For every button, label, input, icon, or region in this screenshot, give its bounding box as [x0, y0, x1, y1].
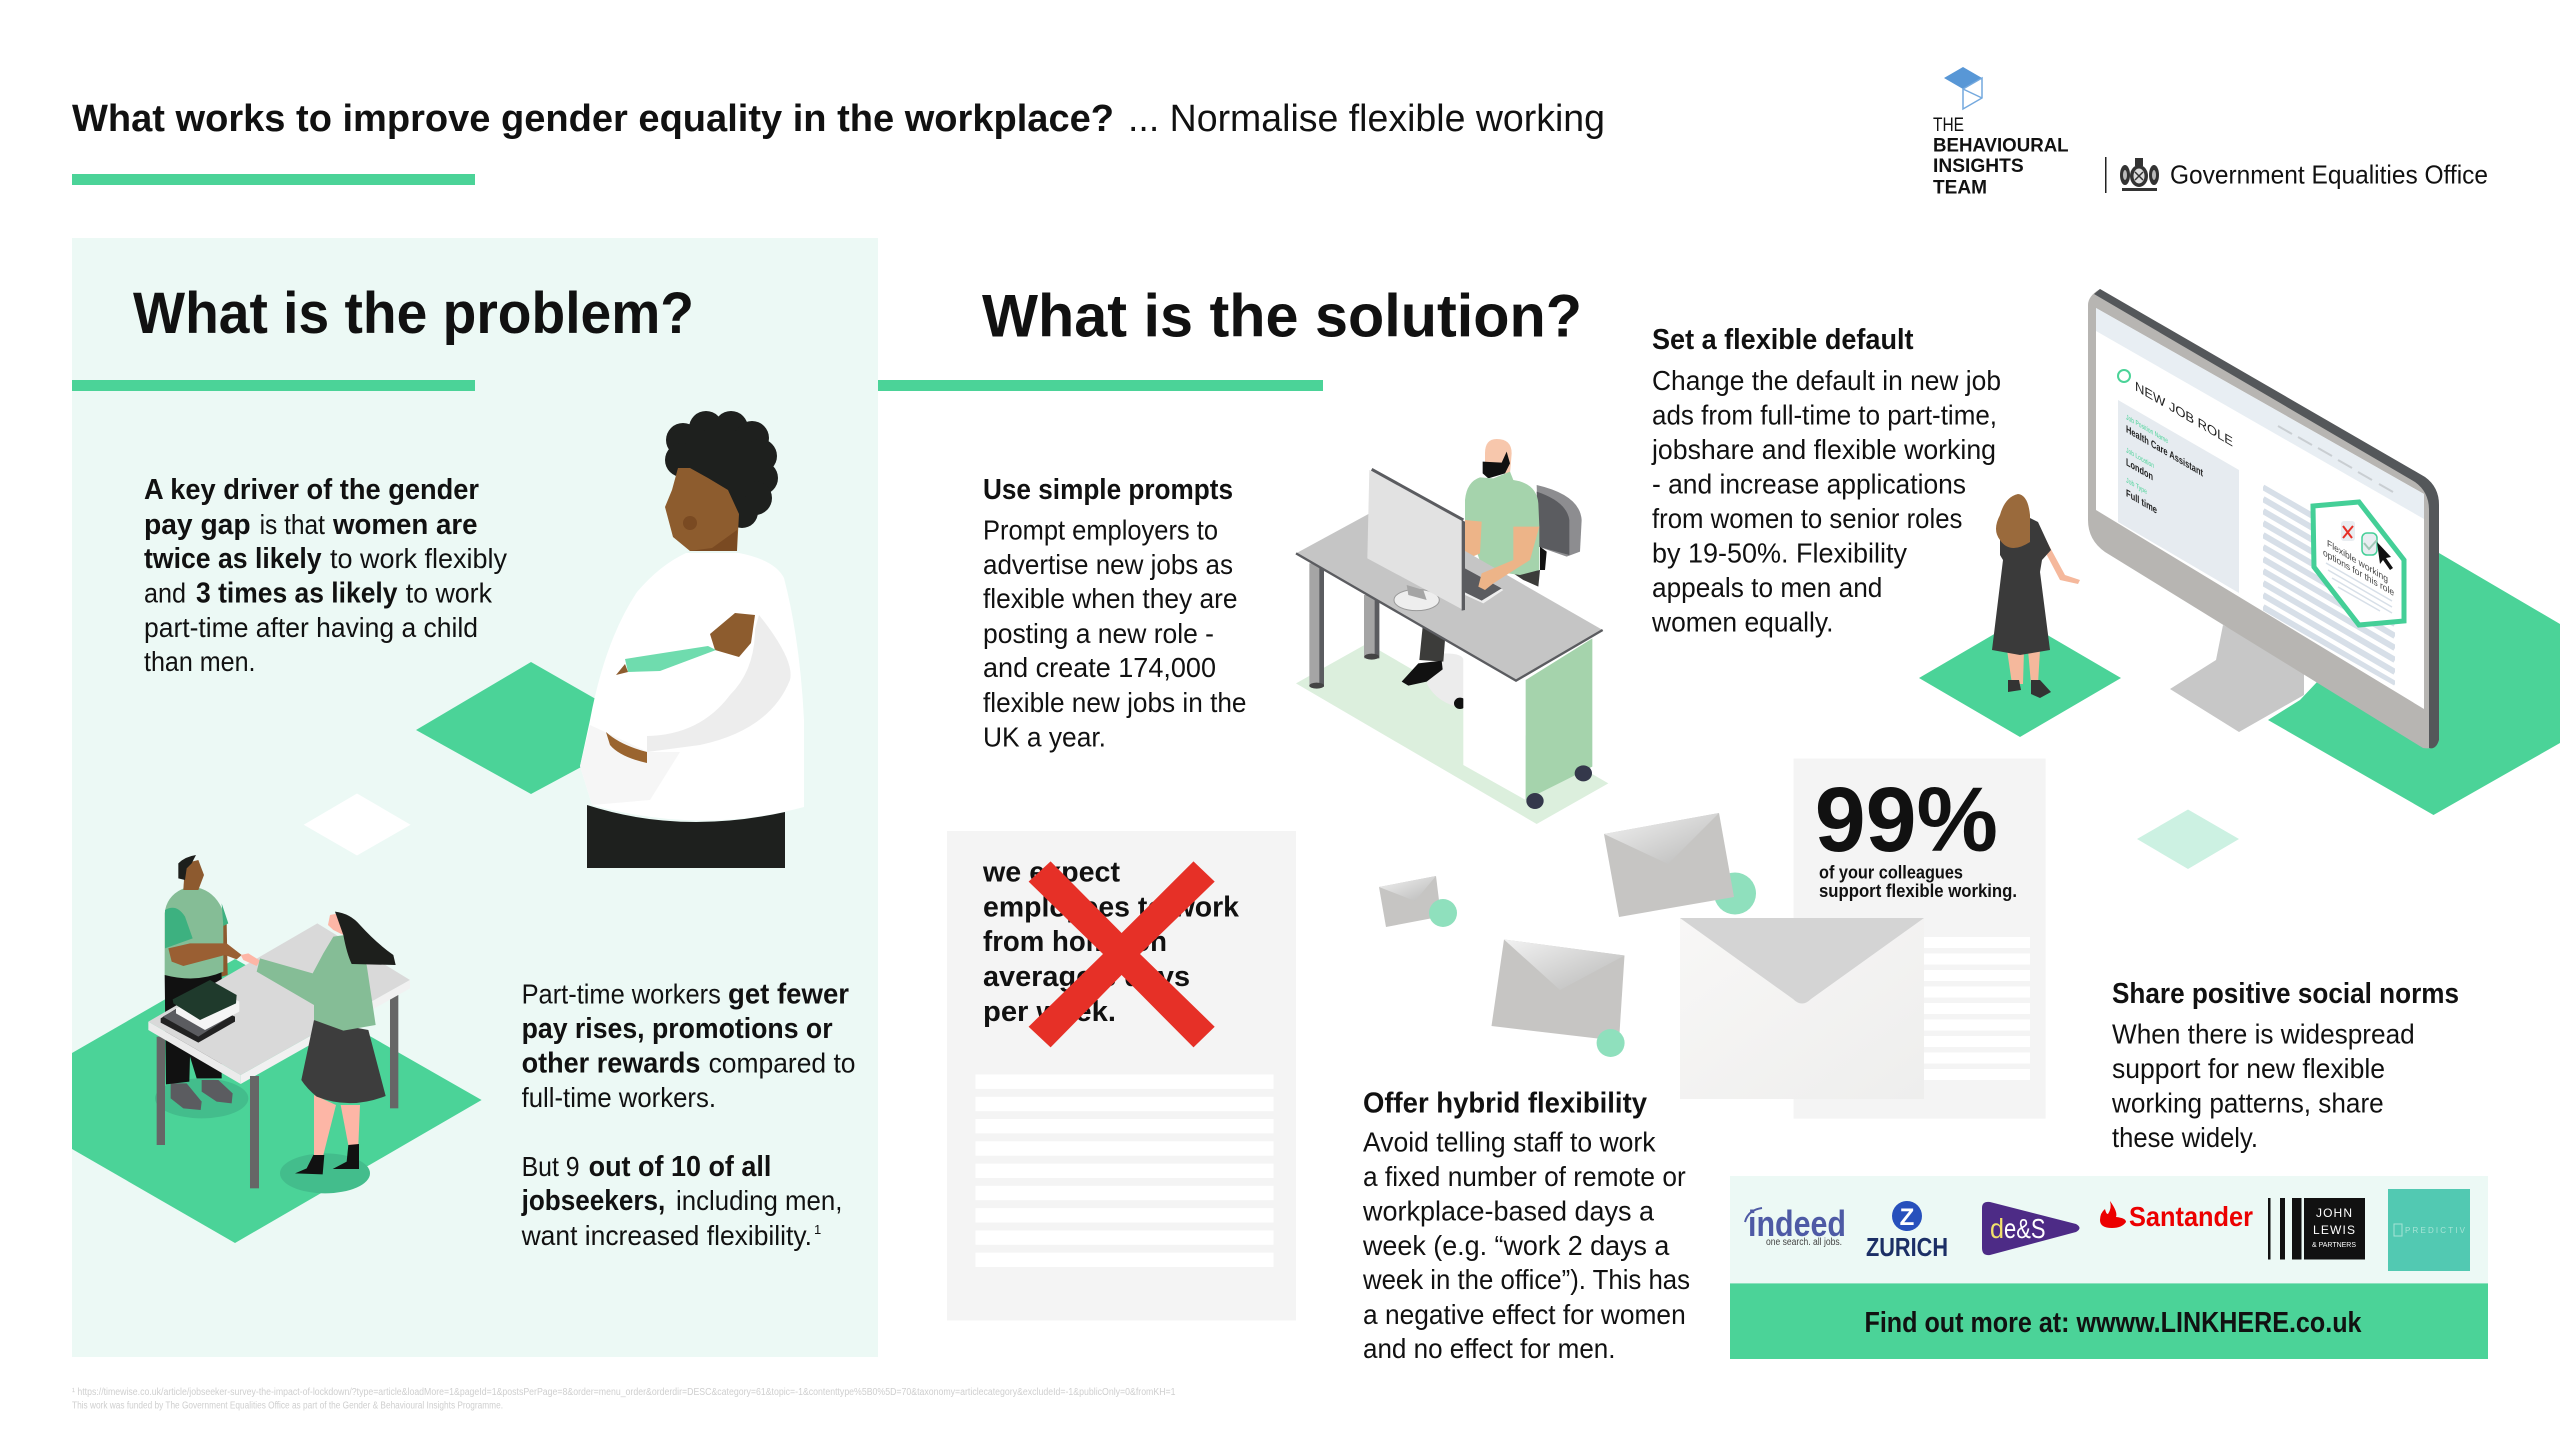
- call to action banner: [1730, 1283, 2488, 1359]
- white diamond: [304, 794, 411, 856]
- logo: Zurich: ZURICH: [1866, 1232, 1948, 1262]
- text block: offer hybrid flexibility: a fixed number of remote or: [1363, 1161, 1686, 1192]
- logo: Zurich: [1866, 1201, 1948, 1262]
- screen form: London: [2126, 457, 2153, 483]
- monitor body: [2088, 289, 2439, 748]
- text block: key driver of pay gap: [144, 474, 507, 677]
- logo: de&amp;s: [1982, 1202, 2080, 1255]
- statistic caption: support flexible working.: [1819, 881, 2017, 901]
- logo: de&amp;s: e&S: [2004, 1213, 2046, 1244]
- struck-out text: average 3 days: [983, 961, 1190, 993]
- text block: 9 out of 10 jobseekers: 1: [814, 1222, 821, 1237]
- logo: John Lewis & Partners: [2268, 1198, 2365, 1260]
- text block: 9 out of 10 jobseekers: [521, 1151, 842, 1251]
- text block: key driver of pay gap: and: [144, 577, 186, 608]
- red cross: [1029, 861, 1215, 1047]
- text block: key driver of pay gap: A key driver of the gender: [144, 474, 479, 506]
- panel: struck-out job ad: [947, 831, 1296, 1320]
- logo: The Behavioural Insights Team: INSIGHTS: [1933, 156, 2024, 177]
- text block: 9 out of 10 jobseekers: jobseekers,: [521, 1185, 665, 1217]
- statistic caption: of your colleagues: [1819, 862, 1963, 882]
- text block: key driver of pay gap: to work flexibly: [330, 543, 507, 574]
- struck-out text: per week.: [983, 996, 1116, 1028]
- diamond under standing woman: [1919, 619, 2121, 737]
- logo: John Lewis & Partners: JOHN: [2316, 1206, 2352, 1220]
- text block: set a flexible default: from women to senior roles: [1652, 503, 1962, 534]
- screen form: [2118, 400, 2239, 593]
- text block: 9 out of 10 jobseekers: including men,: [676, 1185, 842, 1216]
- text block: offer hybrid flexibility: week (e.g. “work 2 days a: [1362, 1230, 1670, 1261]
- text block: key driver of pay gap: is that: [260, 509, 325, 540]
- page title: What works to improve gender equality in the workplace?: [72, 98, 1114, 140]
- text block: key driver of pay gap: than men.: [144, 646, 256, 677]
- illustration: standing woman: [1992, 494, 2080, 698]
- text block: use simple prompts: posting a new role -: [983, 618, 1214, 649]
- text block: set a flexible default: appeals to men and: [1652, 572, 1882, 603]
- icon: medium envelope bottom: [1492, 940, 1625, 1057]
- hexagon callout: flexible working options: options for this role: [2323, 548, 2394, 599]
- text block: use simple prompts: Prompt employers to: [983, 514, 1218, 546]
- footnotes: [72, 1387, 1176, 1412]
- text block: use simple prompts: and create 174,000: [983, 652, 1216, 683]
- text block: key driver of pay gap: part-time after having a child: [144, 612, 478, 643]
- text block: offer hybrid flexibility: and no effect for men.: [1363, 1333, 1616, 1364]
- text block: offer hybrid flexibility: workplace-based days a: [1362, 1196, 1654, 1226]
- hexagon callout: flexible working options: Flexible working: [2327, 539, 2388, 585]
- text block: share positive social norms: working patterns, share: [2111, 1088, 2384, 1119]
- text block: key driver of pay gap: 3 times as likely: [196, 577, 398, 609]
- call to action banner: Find out more at: wwww.LINKHERE.co.uk: [1864, 1307, 2362, 1339]
- text block: use simple prompts: flexible when they are: [983, 583, 1238, 614]
- heading underline: problem: [72, 380, 475, 391]
- text block: set a flexible default: [1651, 324, 2001, 637]
- text block: share positive social norms: support for new flexible: [2112, 1053, 2385, 1084]
- text block: share positive social norms: [2111, 978, 2459, 1153]
- hexagon callout: flexible working options: [2313, 502, 2404, 625]
- screen stripes: [2263, 487, 2395, 684]
- page title: [72, 98, 1605, 140]
- pale diamond: [2137, 810, 2239, 869]
- logo: The Behavioural Insights Team: THE: [1933, 115, 1964, 136]
- screen form: Full time: [2126, 488, 2157, 517]
- text block: 9 out of 10 jobseekers: want increased flexibility.: [521, 1220, 812, 1251]
- text block: share positive social norms: Share positive social norms: [2112, 978, 2459, 1010]
- screen form: Health Care Assistant: [2126, 424, 2203, 480]
- logo: The Behavioural Insights Team: BEHAVIOURAL: [1933, 136, 2069, 156]
- partner logos strip: [1730, 1176, 2488, 1283]
- text block: part-time workers: compared to: [709, 1048, 856, 1079]
- logo: The Behavioural Insights Team: [1933, 67, 2069, 198]
- struck-out text: employees to work: [983, 892, 1239, 924]
- text block: part-time workers: full-time workers.: [522, 1082, 716, 1113]
- logo: John Lewis & Partners: LEWIS: [2313, 1223, 2355, 1237]
- text block: part-time workers: get fewer: [728, 979, 849, 1011]
- logo: Zurich: Z: [1900, 1204, 1914, 1231]
- statistic: 99%: 99%: [1815, 769, 1998, 871]
- logo: Government Equalities Office: Government Equalities Office: [2170, 160, 2488, 190]
- text block: offer hybrid flexibility: Avoid telling staff to work: [1363, 1127, 1656, 1158]
- logo: indeed: indeed: [1748, 1203, 1846, 1244]
- logo: Government Equalities Office: [2105, 157, 2488, 193]
- decorative green diamond behind woman: [416, 662, 650, 794]
- placeholder lines: [1924, 937, 2030, 1080]
- placeholder text lines: [976, 1074, 1274, 1267]
- text block: offer hybrid flexibility: a negative effect for women: [1363, 1299, 1686, 1330]
- text block: share positive social norms: When there is widespread: [2112, 1019, 2415, 1050]
- footnotes: This work was funded by The Government Equalities Office as part of the Gender & Behavioural Insights Programme.: [72, 1401, 503, 1412]
- logo: Santander: Santander: [2129, 1201, 2253, 1232]
- text block: key driver of pay gap: pay gap: [144, 509, 251, 541]
- screen heading: NEW JOB ROLE: [2135, 378, 2233, 450]
- logo: Predictiv: PREDICTIV: [2405, 1226, 2466, 1235]
- text block: use simple prompts: Use simple prompts: [983, 474, 1233, 506]
- struck-out text: from home on: [983, 926, 1167, 958]
- text block: use simple prompts: UK a year.: [983, 722, 1106, 753]
- icon: medium envelope top: [1604, 813, 1756, 917]
- illustration: man at standing desk: [1296, 439, 1608, 824]
- struck-out text: [982, 857, 1239, 1028]
- icon: large envelope: [1680, 918, 1924, 1099]
- text block: part-time workers: pay rises, promotions or: [522, 1013, 833, 1045]
- text block: set a flexible default: - and increase applications: [1652, 469, 1966, 500]
- text block: set a flexible default: Change the default in new job: [1652, 365, 2001, 396]
- text block: key driver of pay gap: women are: [332, 509, 478, 541]
- illustration: woman with crossed arms: [580, 411, 804, 868]
- text block: use simple prompts: advertise new jobs as: [983, 549, 1233, 580]
- text block: set a flexible default: by 19-50%. Flexibility: [1652, 537, 1907, 568]
- logo: indeed: one search. all jobs.: [1766, 1237, 1842, 1248]
- heading: what is the solution: What is the solution?: [982, 282, 1582, 350]
- screen form: Job Position Name: [2126, 413, 2168, 445]
- text block: share positive social norms: these widely.: [2112, 1122, 2258, 1153]
- illustration: monitor with new job role form: [2088, 289, 2439, 748]
- text block: part-time workers: [522, 979, 856, 1113]
- logo: de&amp;s: d: [1990, 1213, 2004, 1244]
- icon: tiny envelope: [1379, 876, 1457, 927]
- monitor stand: [2170, 625, 2304, 732]
- text block: 9 out of 10 jobseekers: out of 10 of all: [589, 1151, 771, 1183]
- panel: what is the problem: [72, 238, 878, 1357]
- text block: 9 out of 10 jobseekers: But 9: [522, 1151, 580, 1182]
- text block: set a flexible default: ads from full-time to part-time,: [1652, 400, 1997, 431]
- cursor: [2377, 542, 2393, 570]
- text block: set a flexible default: jobshare and flexible working: [1651, 434, 1996, 465]
- logo: Predictiv: [2388, 1189, 2470, 1271]
- screen form: Job Type: [2126, 476, 2147, 496]
- heading: what is the problem: What is the problem?: [133, 281, 694, 346]
- text block: part-time workers: Part-time workers: [522, 979, 721, 1010]
- text block: set a flexible default: women equally.: [1651, 606, 1834, 637]
- title underline: [72, 174, 475, 185]
- text block: offer hybrid flexibility: Offer hybrid flexibility: [1363, 1088, 1647, 1120]
- statistic caption: [1819, 862, 2017, 901]
- monitor screen: [2096, 308, 2424, 709]
- text block: key driver of pay gap: twice as likely: [144, 543, 322, 575]
- text block: use simple prompts: [983, 474, 1246, 753]
- page title: ... Normalise flexible working: [1128, 98, 1605, 140]
- panel: 99 percent social norm letter: [1794, 759, 2046, 1119]
- big green diamond behind monitor: [2268, 553, 2560, 815]
- logo: The Behavioural Insights Team: TEAM: [1933, 177, 1987, 198]
- text block: key driver of pay gap: to work: [406, 577, 493, 608]
- text block: offer hybrid flexibility: week in the office”). This has: [1362, 1264, 1690, 1295]
- illustration: two people shaking hands at a desk: [72, 855, 482, 1243]
- text block: part-time workers: other rewards: [522, 1048, 700, 1080]
- screen form: Job Location: [2126, 446, 2154, 470]
- heading underline: solution: [878, 380, 1323, 391]
- text block: offer hybrid flexibility: [1362, 1088, 1690, 1364]
- footnotes: ¹ https://timewise.co.uk/article/jobseeker-survey-the-impact-of-lockdown/?type=article&loadMore=1&pageId=1&postsPerPage=8&order=menu_order&orderdir=DESC&category=61&topic=-1&contenttype%5B0%5D=70&taxonomy=articlecategory&excludeId=-1&publicOnly=0&fromKH=1: [72, 1387, 1176, 1398]
- struck-out text: we expect: [982, 857, 1120, 889]
- text block: set a flexible default: Set a flexible default: [1652, 324, 1914, 356]
- logo: John Lewis & Partners: & PARTNERS: [2312, 1240, 2356, 1249]
- text block: use simple prompts: flexible new jobs in the: [983, 687, 1246, 718]
